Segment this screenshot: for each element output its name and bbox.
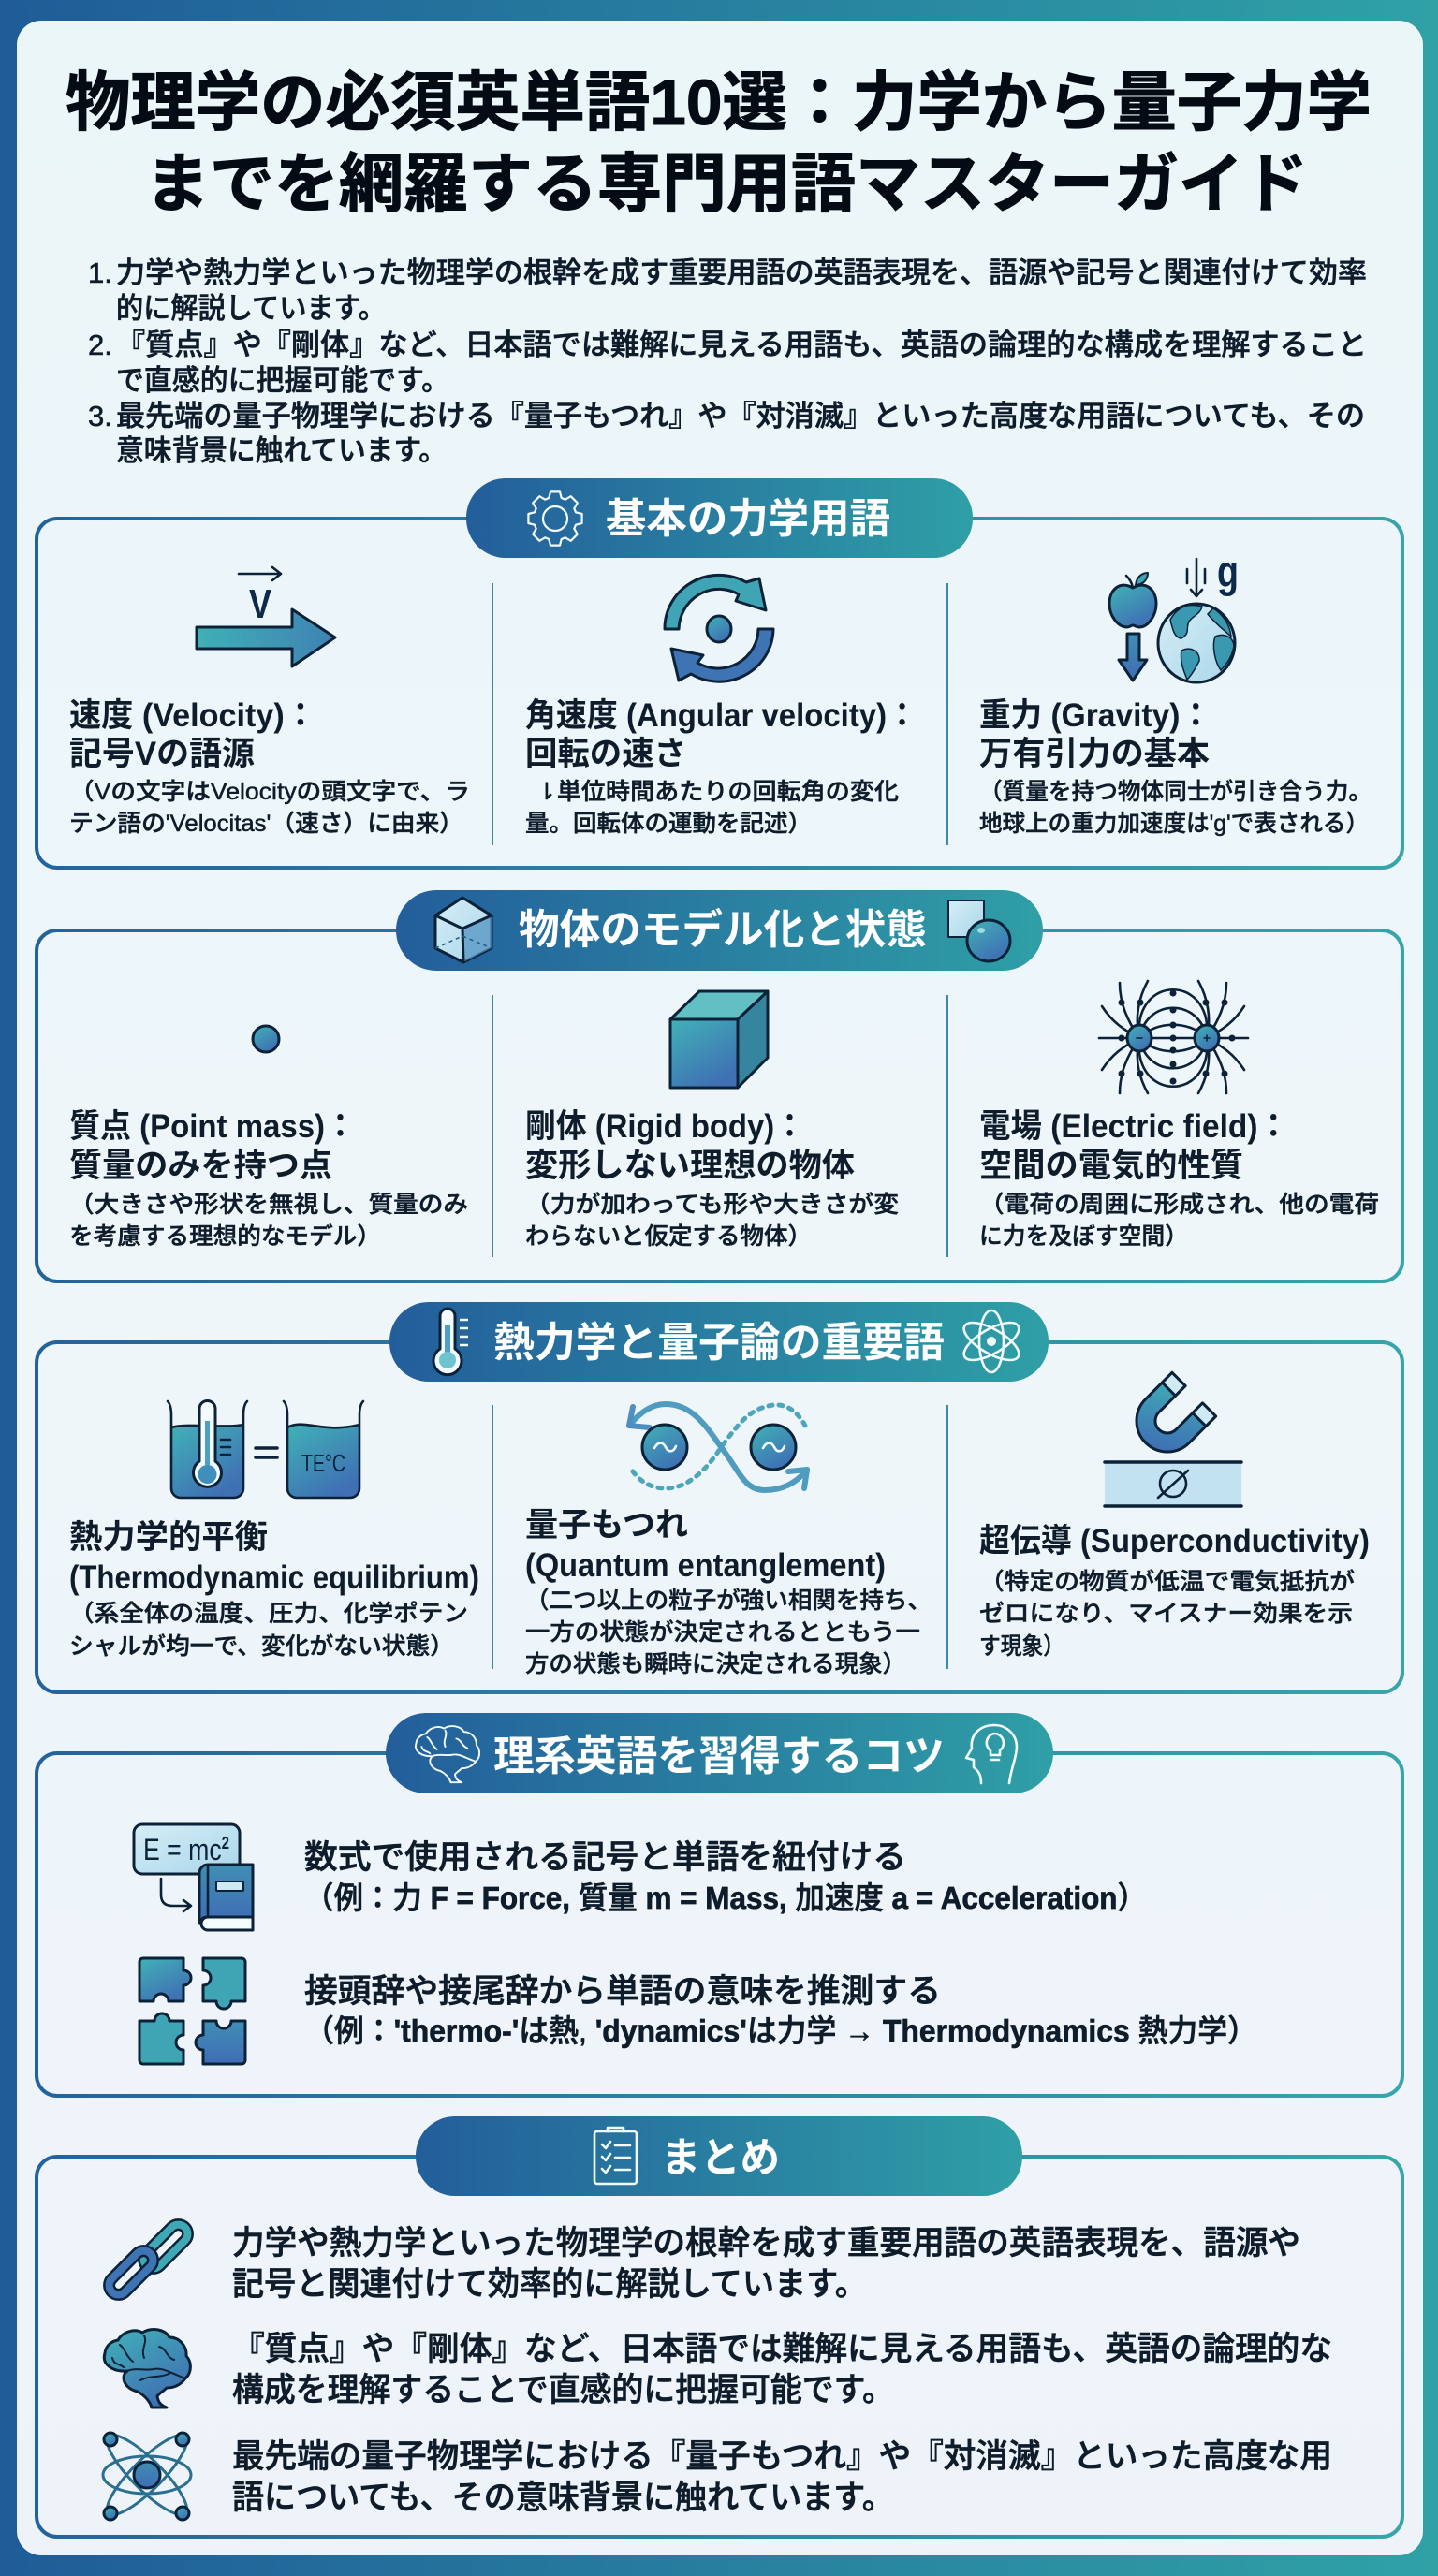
term: electric field: 空間の電気的性質 [979, 1148, 1243, 1184]
term: angular velocity: ⇂単位時間あたりの回転角の変化 [536, 779, 899, 805]
section pill: 理系英語を習得するコツ: 理系英語を習得するコツ [493, 1734, 945, 1779]
term: rigid body: 変形しない理想の物体 [525, 1148, 855, 1184]
panel: basic mechanics terms [37, 478, 1402, 868]
icon: square and sphere [948, 900, 1010, 961]
section pill: 理系英語を習得するコツ [386, 1713, 1053, 1793]
panel: object modelling and states [37, 890, 1402, 1281]
section pill: 物体のモデル化と状態 [396, 890, 1043, 971]
section pill: まとめ: まとめ [661, 2135, 780, 2181]
term: velocity [69, 697, 470, 837]
text: summary point 1: 力学や熱力学といった物理学の根幹を成す重要用語の英語表現を、語源や [232, 2225, 1300, 2261]
icon: formula to book: 2 [222, 1834, 229, 1852]
term: rigid body [525, 1108, 899, 1250]
title: 物理学の必須英単語10選：力学から量子力学 [66, 66, 1372, 139]
icon: brain outline [416, 1726, 479, 1782]
intro numbered list: 『質点』や『剛体』など、日本語では難解に見える用語も、英語の論理的な構成を理解すること [116, 329, 1367, 361]
icon: apple and earth gravity [1109, 548, 1239, 682]
icon: atom [959, 1310, 1024, 1372]
text: infer meaning from prefixes [304, 1973, 1257, 2048]
text: summary point 1 [232, 2225, 1300, 2303]
term: gravity: （質量を持つ物体同士が引き合う力。 [979, 779, 1372, 805]
term: angular velocity: 角速度 (Angular velocity)： [525, 697, 917, 734]
intro numbered list: 的に解説しています。 [116, 292, 386, 325]
icon: magnet over superconductor [1105, 1372, 1241, 1506]
icon: transparent cube [435, 898, 492, 962]
text: summary point 2: 構成を理解することで直感的に把握可能です。 [232, 2372, 894, 2408]
term: velocity: 記号Vの語源 [69, 736, 255, 772]
intro numbered list [88, 256, 1367, 467]
text: summary point 1: 記号と関連付けて効率的に解説しています。 [232, 2266, 867, 2303]
icon: beakers in equilibrium [168, 1400, 363, 1498]
term: thermodynamic equilibrium [69, 1519, 479, 1660]
term: thermodynamic equilibrium: シャルが均一で、変化がない状態） [69, 1633, 454, 1660]
icon: quantum entanglement [629, 1404, 807, 1490]
term: superconductivity: す現象） [979, 1633, 1064, 1660]
term: superconductivity: （特定の物質が低温で電気抵抗が [979, 1569, 1355, 1595]
term: point mass [69, 1108, 468, 1250]
section pill: 基本の力学用語: 基本の力学用語 [606, 496, 890, 542]
section pill: 物体のモデル化と状態: 物体のモデル化と状態 [519, 907, 927, 953]
term: angular velocity: 量。回転体の運動を記述） [525, 811, 812, 837]
intro numbered list: で直感的に把握可能です。 [116, 364, 449, 397]
term: quantum entanglement: 量子もつれ [525, 1507, 688, 1544]
icon: point mass [253, 1026, 279, 1052]
section pill: まとめ [416, 2116, 1022, 2196]
icon: puzzle pieces [139, 1958, 245, 2064]
term: quantum entanglement [525, 1507, 932, 1677]
text: summary point 3: 最先端の量子物理学における『量子もつれ』や『対消滅』といった高度な用 [232, 2438, 1332, 2475]
intro numbered list: 3. [88, 400, 112, 432]
term: electric field: （電荷の周囲に形成され、他の電荷 [979, 1192, 1379, 1218]
icon: electric field lines [1099, 981, 1248, 1093]
term: point mass: （大きさや形状を無視し、質量のみ [69, 1192, 468, 1218]
title: までを網羅する専門用語マスターガイド [145, 148, 1308, 220]
term: rigid body: （力が加わっても形や大きさが変 [525, 1192, 899, 1218]
icon: clipboard checklist [594, 2128, 637, 2184]
intro numbered list: 最先端の量子物理学における『量子もつれ』や『対消滅』といった高度な用語についても、その [116, 400, 1365, 432]
text: summary point 2: 『質点』や『剛体』など、日本語では難解に見える用語も、英語の論理的な [232, 2331, 1332, 2367]
text: link symbols with words: （例：力 F = Force, 質量 m = Mass, 加速度 a = Acceleration） [304, 1881, 1147, 1915]
term: superconductivity [979, 1523, 1370, 1660]
text: link symbols with words: 数式で使用される記号と単語を紐付ける [304, 1839, 906, 1876]
text: summary point 2 [232, 2331, 1332, 2408]
icon: apple and earth gravity: g [1217, 548, 1239, 597]
term: thermodynamic equilibrium: （系全体の温度、圧力、化学ポテン [69, 1601, 468, 1627]
term: gravity: 万有引力の基本 [979, 736, 1210, 772]
term: velocity: （Vの文字はVelocityの頭文字で、ラ [69, 779, 470, 805]
section pill: 基本の力学用語 [466, 478, 973, 558]
icon: velocity arrow: V [249, 581, 272, 627]
term: quantum entanglement: （二つ以上の粒子が強い相関を持ち、 [525, 1588, 932, 1614]
text: summary point 3 [232, 2438, 1332, 2516]
panel: thermodynamics and quantum terms [37, 1302, 1402, 1692]
section pill: 熱力学と量子論の重要語: 熱力学と量子論の重要語 [493, 1320, 945, 1366]
icon: thermometer [433, 1309, 468, 1375]
icon: formula to book [134, 1824, 253, 1930]
term: rigid body: 剛体 (Rigid body)： [525, 1108, 805, 1145]
icon: rigid cube [670, 991, 768, 1088]
icon: formula to book: E = mc [143, 1833, 237, 1866]
term: quantum entanglement: 方の状態も瞬時に決定される現象） [525, 1651, 906, 1677]
term: quantum entanglement: (Quantum entanglement) [525, 1547, 886, 1584]
term: quantum entanglement: 一方の状態が決定されるとともう一 [525, 1619, 920, 1646]
term: point mass: 質量のみを持つ点 [69, 1148, 332, 1184]
icon: brain [104, 2330, 190, 2408]
icon: rotation arrows [665, 575, 773, 681]
text: link symbols with words [304, 1839, 1147, 1915]
section pill: 熱力学と量子論の重要語 [389, 1302, 1049, 1382]
term: electric field: に力を及ぼす空間） [979, 1223, 1188, 1250]
icon: atom network [98, 2426, 196, 2524]
icon: gear [528, 491, 582, 546]
icon: beakers in equilibrium: TE°C [301, 1449, 345, 1477]
intro numbered list: 力学や熱力学といった物理学の根幹を成す重要用語の英語表現を、語源や記号と関連付けて効率 [116, 256, 1367, 289]
icon: head with light bulb [966, 1725, 1017, 1783]
icon: chain link [105, 2220, 192, 2299]
term: thermodynamic equilibrium: (Thermodynamic equilibrium) [69, 1559, 479, 1596]
icon: velocity arrow [197, 567, 335, 666]
panel: tips for learning science English [37, 1713, 1402, 2096]
term: gravity: 重力 (Gravity)： [979, 697, 1211, 734]
text: summary point 3: 語についても、その意味背景に触れています。 [232, 2480, 894, 2516]
panel: summary [37, 2116, 1402, 2537]
intro numbered list: 2. [88, 329, 112, 361]
term: velocity: 速度 (Velocity)： [69, 697, 316, 734]
term: gravity [979, 697, 1372, 837]
intro numbered list: 意味背景に触れています。 [116, 434, 447, 467]
term: electric field: 電場 (Electric field)： [979, 1108, 1289, 1145]
term: velocity: テン語の'Velocitas'（速さ）に由来） [69, 811, 463, 837]
term: angular velocity: 回転の速さ [525, 736, 686, 772]
title [66, 66, 1372, 220]
term: superconductivity: 超伝導 (Superconductivity) [979, 1523, 1370, 1559]
text: infer meaning from prefixes: （例：'thermo-'は熱, 'dynamics'は力学 → Thermodynamics 熱力学） [304, 2013, 1257, 2048]
term: point mass: を考慮する理想的なモデル） [69, 1222, 381, 1250]
term: thermodynamic equilibrium: 熱力学的平衡 [69, 1519, 268, 1556]
term: point mass: 質点 (Point mass)： [69, 1108, 356, 1145]
intro numbered list: 1. [88, 256, 112, 289]
term: angular velocity [525, 697, 917, 837]
term: rigid body: わらないと仮定する物体） [525, 1223, 812, 1250]
term: superconductivity: ゼロになり、マイスナー効果を示 [979, 1601, 1353, 1627]
term: electric field [979, 1108, 1379, 1250]
text: infer meaning from prefixes: 接頭辞や接尾辞から単語の意味を推測する [304, 1973, 941, 2010]
term: gravity: 地球上の重力加速度は'g'で表される） [979, 811, 1369, 837]
